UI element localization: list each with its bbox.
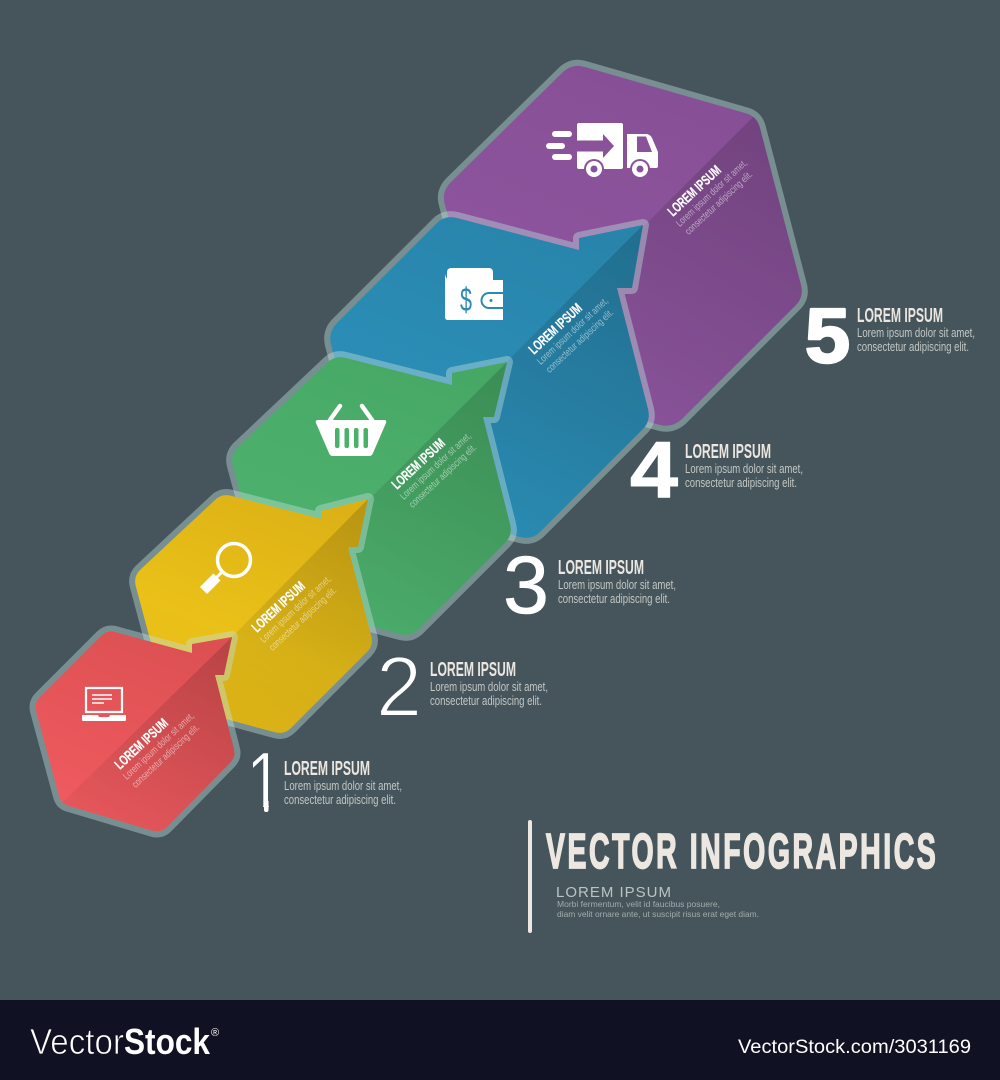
number 5: 5 bbox=[805, 294, 850, 380]
number 1 bbox=[252, 753, 269, 812]
label 2 bbox=[430, 659, 548, 708]
text: step 3 rotated caption: LOREM IPSUM bbox=[388, 435, 448, 492]
text: step 2 rotated caption: LOREM IPSUM bbox=[248, 578, 308, 635]
text: step 5 rotated caption bbox=[663, 145, 758, 238]
text: step 1 rotated caption: LOREM IPSUM bbox=[111, 715, 171, 772]
text: step 4 rotated caption: consectetur adipiscing elit. bbox=[544, 307, 616, 375]
panel: step 4 blue arrow hexagon bbox=[324, 211, 655, 544]
number 3: 3 bbox=[503, 540, 549, 631]
text: step 5 rotated caption: Lorem ipsum dolor sit amet, bbox=[674, 158, 750, 229]
label 3 bbox=[558, 557, 676, 606]
number 1: 1 bbox=[246, 735, 283, 831]
label 1 bbox=[284, 758, 402, 807]
footer bar bbox=[0, 1000, 1000, 1080]
panel: step 3 green arrow hexagon bbox=[226, 351, 517, 641]
icon: magnifying glass bbox=[204, 544, 250, 590]
text: step 2 rotated caption: Lorem ipsum dolor sit amet, bbox=[258, 574, 334, 645]
label 4: LOREM IPSUM bbox=[685, 441, 771, 463]
body text: diam velit ornare ante, ut suscipit risus erat eget diam. bbox=[557, 909, 759, 919]
text: step 5 rotated caption: LOREM IPSUM bbox=[664, 162, 724, 219]
text: step 2 rotated caption: consectetur adipiscing elit. bbox=[267, 585, 339, 653]
text: step 4 rotated caption: LOREM IPSUM bbox=[525, 300, 585, 357]
label 5 bbox=[857, 305, 975, 354]
text: step 1 rotated caption: Lorem ipsum dolor sit amet, bbox=[121, 711, 197, 782]
text: step 4 rotated caption bbox=[524, 283, 619, 376]
icon: delivery truck bbox=[546, 123, 658, 179]
title block bbox=[528, 820, 936, 933]
panel: step 2 yellow arrow hexagon bbox=[129, 489, 378, 739]
text: step 5 rotated caption: consectetur adipiscing elit. bbox=[683, 169, 755, 237]
label 3: consectetur adipiscing elit. bbox=[558, 591, 670, 606]
logo: Vector bbox=[30, 1021, 124, 1062]
text: step 3 rotated caption: consectetur adipiscing elit. bbox=[407, 442, 479, 510]
label 3: LOREM IPSUM bbox=[558, 557, 644, 579]
label 1: consectetur adipiscing elit. bbox=[284, 792, 396, 807]
logo: ® bbox=[211, 1027, 219, 1039]
subheading: LOREM IPSUM bbox=[556, 884, 671, 901]
text: step 2 rotated caption bbox=[247, 561, 342, 654]
label 1: Lorem ipsum dolor sit amet, bbox=[284, 778, 402, 793]
label 2: Lorem ipsum dolor sit amet, bbox=[430, 679, 548, 694]
label 2: consectetur adipiscing elit. bbox=[430, 693, 542, 708]
text: step 3 rotated caption bbox=[387, 418, 482, 511]
panel: step 5 purple hexagon bbox=[444, 66, 830, 440]
number 4: 4 bbox=[630, 425, 679, 514]
panel: step 1 red arrow hexagon bbox=[30, 626, 240, 838]
number 2: 2 bbox=[376, 640, 422, 735]
icon: shopping basket bbox=[316, 406, 386, 456]
label 2: LOREM IPSUM bbox=[430, 659, 516, 681]
heading: vector infographics: VECTOR INFOGRAPHICS bbox=[546, 825, 936, 879]
logo bbox=[30, 1021, 219, 1062]
text: step 3 rotated caption: Lorem ipsum dolor sit amet, bbox=[398, 431, 474, 502]
label 4: Lorem ipsum dolor sit amet, bbox=[685, 461, 803, 476]
label 1: LOREM IPSUM bbox=[284, 758, 370, 780]
label 4: consectetur adipiscing elit. bbox=[685, 475, 797, 490]
logo: Stock bbox=[124, 1021, 211, 1062]
image id: VectorStock.com/3031169 bbox=[738, 1037, 971, 1058]
text: step 1 rotated caption bbox=[110, 698, 205, 791]
text: step 1 rotated caption: consectetur adipiscing elit. bbox=[130, 722, 202, 790]
icon: laptop bbox=[82, 688, 126, 721]
text: step 4 rotated caption: Lorem ipsum dolor sit amet, bbox=[535, 296, 611, 367]
icon: wallet bbox=[445, 268, 503, 320]
icon: wallet: $ bbox=[460, 281, 472, 318]
body text: Morbi fermentum, velit id faucibus posuere, bbox=[557, 899, 720, 909]
label 5: LOREM IPSUM bbox=[857, 305, 943, 327]
label 3: Lorem ipsum dolor sit amet, bbox=[558, 577, 676, 592]
body text bbox=[557, 899, 759, 919]
label 4 bbox=[685, 441, 803, 490]
